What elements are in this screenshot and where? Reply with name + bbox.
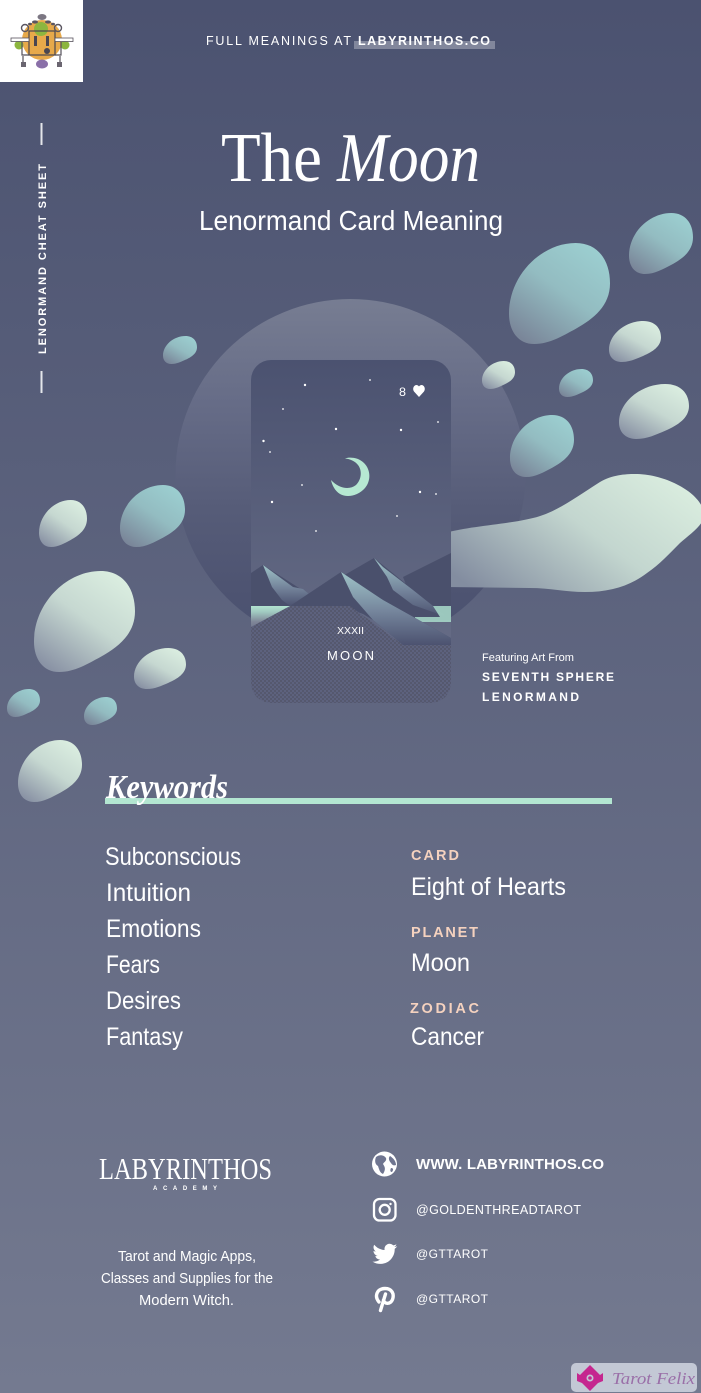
keywords list: Desires [106, 987, 181, 1015]
card correspondence [411, 848, 566, 901]
card name: MOON [327, 648, 374, 663]
header link: LABYRINTHOS.CO [358, 34, 490, 48]
dotted ground [251, 606, 451, 703]
zodiac correspondence: ZODIAC [410, 1001, 480, 1017]
watermark badge [571, 1363, 697, 1392]
labyrinthos wordmark: LABYRINTHOS [99, 1151, 272, 1186]
card number and suit: 8 [399, 385, 406, 399]
keywords list: Subconscious [105, 843, 241, 871]
vertical side label: LENORMAND CHEAT SHEET [37, 164, 49, 354]
card correspondence: Eight of Hearts [411, 873, 566, 901]
art credit: SEVENTH SPHERE [482, 670, 614, 684]
keywords list: Fantasy [106, 1023, 183, 1051]
blobs: left cluster [7, 336, 197, 802]
keywords heading [105, 769, 612, 806]
subtitle: Lenormand Card Meaning [199, 205, 503, 236]
pinterest handle: @GTTAROT [416, 1292, 489, 1306]
icon: instagram [374, 1199, 396, 1220]
tarot card [251, 360, 451, 703]
mountains [251, 553, 451, 645]
keywords heading: Keywords [105, 769, 228, 806]
planet correspondence [411, 925, 478, 977]
title [221, 120, 480, 197]
zodiac correspondence [410, 1001, 484, 1051]
card number and suit [399, 385, 425, 399]
watermark badge: Tarot Felix [612, 1369, 695, 1388]
header link [206, 34, 495, 49]
icon: twitter [372, 1244, 397, 1264]
labyrinthos wordmark: ACADEMY [153, 1186, 217, 1192]
art credit: LENORMAND [482, 690, 579, 704]
twitter handle: @GTTAROT [416, 1247, 489, 1261]
art credit: Featuring Art From [482, 652, 574, 664]
card numeral: XXXII [337, 625, 364, 637]
keywords list: Emotions [106, 915, 201, 943]
labyrinthos wordmark [99, 1151, 272, 1192]
card correspondence: CARD [411, 848, 459, 864]
tagline [101, 1248, 273, 1309]
header link: FULL MEANINGS AT [206, 34, 351, 48]
icon: globe [372, 1152, 397, 1176]
stars [262, 379, 439, 532]
planet correspondence: PLANET [411, 925, 478, 941]
logo tile [0, 0, 83, 82]
title: Moon [336, 120, 480, 197]
art credit [482, 652, 614, 704]
keywords list: Intuition [106, 879, 191, 907]
website link: WWW. LABYRINTHOS.CO [416, 1156, 604, 1173]
large swoosh blob [445, 474, 701, 592]
right water [415, 606, 451, 622]
keywords list: Fears [106, 951, 160, 979]
instagram handle: @GOLDENTHREADTAROT [416, 1203, 581, 1217]
background circle [176, 299, 526, 649]
icon: pinterest [377, 1288, 393, 1310]
tagline: Classes and Supplies for the [101, 1270, 273, 1287]
title: The [221, 120, 322, 197]
keywords list [105, 843, 241, 1051]
crescent moon [331, 458, 369, 496]
blobs: right cluster [482, 213, 693, 477]
tagline: Tarot and Magic Apps, [118, 1248, 256, 1265]
tagline: Modern Witch. [139, 1292, 234, 1309]
zodiac correspondence: Cancer [411, 1023, 484, 1051]
planet correspondence: Moon [411, 949, 470, 977]
left water [251, 606, 290, 627]
